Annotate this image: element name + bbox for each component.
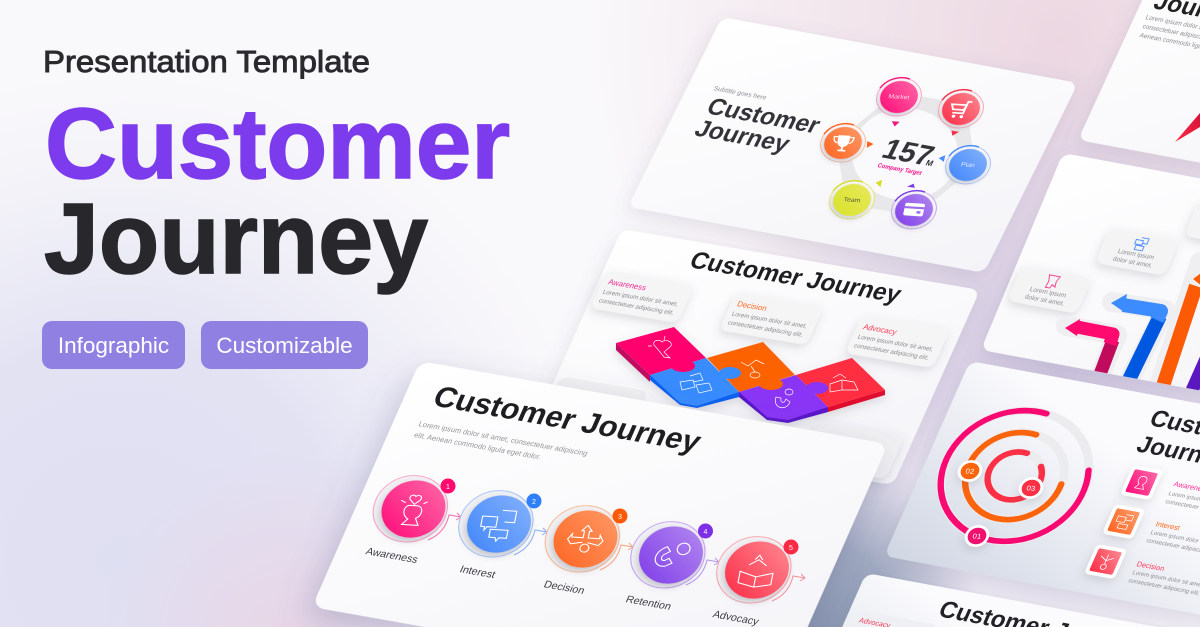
wheel node: market: Market (888, 93, 910, 101)
wheel node: plan (934, 144, 994, 185)
wheel node: card (888, 183, 942, 230)
placeholder box: lower right (798, 421, 905, 479)
step 4: retention: Retention (624, 594, 673, 613)
callout: decision: consectetuer adipiscing elit. (727, 319, 804, 339)
subtitle: Subtitle goes here (712, 85, 768, 102)
callout: interest box: dolor sit amet. (1112, 256, 1154, 270)
metric: 157M: M (924, 158, 935, 168)
donut chart (928, 408, 1101, 544)
puzzle (616, 327, 885, 423)
callout: decision: Lorem ipsum dolor sit amet, (730, 311, 808, 330)
label: company target: Company Target (876, 162, 924, 177)
step 3: decision: 3 (618, 514, 622, 521)
slide title: Customer Journey (686, 247, 906, 308)
slide body text (1138, 14, 1200, 54)
callout: decision (719, 292, 824, 345)
puzzle piece: advocacy (796, 358, 885, 407)
tag: infographic (42, 321, 185, 369)
callout: advocacy (845, 315, 950, 368)
panel: bottom right slide (780, 573, 1200, 627)
title: customer: Customer (45, 88, 510, 200)
panel: top right slide (1078, 0, 1200, 206)
slide description: elit. Aenean commodo ligula eget dolor. (413, 431, 543, 461)
step 3: decision (539, 503, 633, 597)
callout: awareness: Lorem ipsum dolor sit amet, (601, 289, 679, 308)
badge: 03: 03 (1026, 484, 1036, 493)
icon: interest (680, 373, 712, 393)
callout: decision: Decision (736, 300, 768, 313)
slide title: Journey (690, 116, 795, 158)
tag: infographic: Infographic (58, 333, 169, 358)
panel: donut slide (884, 361, 1200, 622)
callout: advocacy: Advocacy (862, 323, 898, 337)
panel: arrows slide (981, 153, 1200, 416)
arrow: blue (1111, 294, 1161, 390)
list item: decision (1084, 544, 1200, 597)
badge: 01 (963, 525, 991, 547)
step 1: awareness: Awareness (364, 546, 420, 566)
list item: interest: Interest (1154, 519, 1182, 532)
slide title (1133, 405, 1200, 473)
wheel node: trophy (817, 122, 878, 164)
list item: decision: consectetuer adipiscing elit. (1127, 578, 1200, 597)
puzzle piece: decision (707, 342, 795, 392)
step 5: advocacy: 5 (789, 545, 793, 552)
step 3: decision: Decision (542, 579, 587, 597)
callout: advocacy box (841, 610, 938, 627)
callout: advocacy: Lorem ipsum dolor sit amet, (856, 334, 934, 353)
wheel node: team: Team (843, 197, 861, 204)
title: journey: Journey (44, 183, 428, 295)
puzzle piece: awareness (616, 327, 706, 375)
badge: 03 (1017, 477, 1045, 499)
step 1: awareness (364, 473, 461, 566)
tag: customizable: Customizable (216, 333, 353, 358)
ring: inner (983, 451, 1046, 501)
step 1: awareness: 1 (446, 484, 450, 491)
red arrow tip (1175, 113, 1200, 142)
step 4: retention (624, 519, 719, 613)
icon: awareness (648, 336, 671, 358)
callout: awareness (590, 270, 695, 323)
wheel node: market (871, 76, 925, 128)
icon: advocacy (830, 374, 858, 392)
callout: interest box: Lorem ipsum (1116, 248, 1155, 261)
arrow: orange (1160, 270, 1200, 395)
heading: presentation template: Presentation Template (43, 44, 370, 79)
icon: retention (775, 389, 793, 408)
callout: awareness: Awareness (607, 278, 648, 292)
callout: interest box (1095, 227, 1179, 276)
placeholder box: lower left (544, 376, 649, 429)
badge: 02 (956, 460, 984, 482)
step 2: interest: 2 (532, 499, 536, 506)
callout: third box (1184, 200, 1200, 249)
callout: awareness box (1007, 265, 1091, 314)
slide title (690, 94, 825, 158)
panel: target wheel slide (628, 17, 1078, 273)
wheel node: plan: Plan (960, 162, 976, 169)
slide description: Lorem ipsum dolor sit amet, consectetuer adipiscing (417, 420, 589, 458)
wheel connector hub (843, 99, 968, 208)
callout: advocacy: consectetuer adipiscing elit. (853, 342, 930, 362)
step 2: interest: Interest (458, 564, 497, 581)
callout: awareness box: Lorem ipsum (1028, 286, 1067, 299)
arrow: pink (1065, 319, 1113, 385)
slide title: Customer Journey (428, 380, 706, 458)
puzzle piece: retention (739, 375, 828, 420)
callout: awareness box: dolor sit amet. (1024, 294, 1066, 308)
wheel node: team (826, 177, 882, 220)
panel: puzzle slide (535, 229, 980, 485)
step 5: advocacy (711, 534, 805, 627)
arrow: purple (1190, 350, 1200, 395)
arrows chart (1065, 262, 1200, 395)
panel: steps slide (312, 361, 888, 627)
ring: outer (928, 408, 1101, 544)
badge: 02: 02 (965, 467, 975, 476)
wheel node: cart (933, 88, 987, 137)
badge: 01: 01 (972, 532, 982, 541)
slide title: Customer (702, 94, 825, 139)
callout: awareness: consectetuer adipiscing elit. (598, 297, 675, 317)
metric: 157M: 157 (877, 133, 939, 172)
list item: awareness (1120, 465, 1200, 518)
step 2: interest (453, 488, 547, 581)
step 4: retention: 4 (704, 529, 708, 536)
ring: middle (957, 431, 1072, 522)
list item: interest (1102, 504, 1200, 557)
list item: decision: Decision (1135, 559, 1166, 573)
puzzle piece: interest (650, 358, 739, 406)
icon: decision (741, 360, 764, 378)
tag: customizable (201, 321, 368, 369)
